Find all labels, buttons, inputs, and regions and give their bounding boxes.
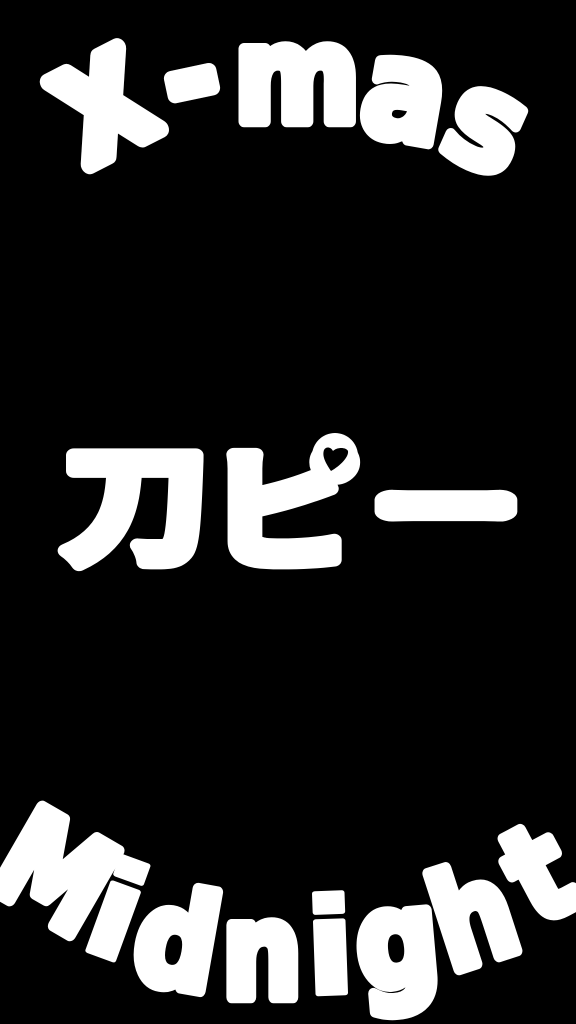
heading: X-mas curved: - [150,0,231,153]
heading: X-mas curved [34,0,554,208]
heading: X-mas curved: X [34,23,176,193]
main title: katakana: 刀 [61,436,209,580]
footer: Midnight curved [0,779,576,1024]
footer: Midnight curved: n [222,874,302,1024]
icon: heart in handakuten [312,433,358,479]
footer: Midnight curved: i [301,870,359,1024]
heading: X-mas curved: a [351,5,460,178]
main title: katakana: ー [380,467,512,551]
heading: X-mas curved: m [234,0,360,152]
footer: Midnight curved: i [65,831,167,994]
main title: katakana: ピ [210,437,360,586]
footer: Midnight curved: g [349,861,445,1020]
heading: X-mas curved: s [423,38,554,208]
main title: katakana [61,433,512,586]
footer: Midnight curved: h [412,831,535,1002]
footer: Midnight curved: d [123,859,231,1024]
